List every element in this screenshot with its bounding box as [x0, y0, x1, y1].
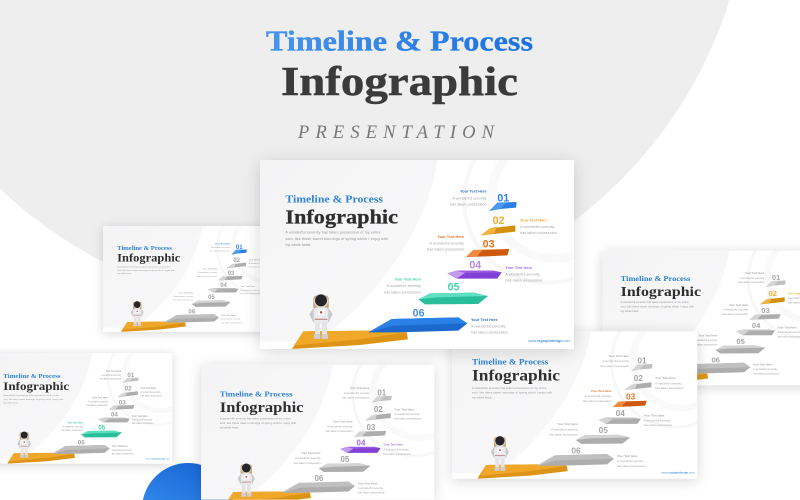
step 06: Your Text Here [471, 318, 498, 322]
slide: lower left, step 05 highlighted: A wonderful serenity [101, 374, 122, 377]
slide: upper right, step 02 highlighted: 06 [711, 355, 720, 364]
slide: lower right, step 03 highlighted: Your Text Here [617, 454, 638, 458]
slide: lower right, step 03 highlighted: A wonderful serenity [551, 427, 578, 431]
step 04: A wonderful serenity [505, 273, 540, 277]
slide: upper right, step 02 highlighted: has taken possession [691, 343, 718, 347]
slide: bottom center, step 04 highlighted: A wonderful serenity has taken possession of my entire [220, 416, 291, 420]
slide: bottom center, step 04 highlighted: Your Text Here [383, 443, 403, 447]
slide: bottom center, step 04 highlighted: Your Text Here [358, 481, 378, 485]
slide: lower left, step 05 highlighted: Your Text Here [92, 397, 109, 400]
step 02: 02 [493, 215, 505, 227]
slide: upper right, step 02 highlighted: 02 [769, 289, 777, 298]
slide: lower right, step 03 highlighted: A wonderful serenity has taken possession of my entire [472, 386, 547, 390]
step 04: 04 [469, 260, 481, 272]
step 05 [384, 277, 488, 304]
slide: upper left, step 01 highlighted: 01 [236, 245, 243, 251]
slide: lower left, step 05 highlighted [0, 350, 176, 469]
slide: upper right, step 02 highlighted: my whole heart. [621, 309, 639, 313]
step 03: A wonderful serenity [430, 241, 464, 245]
slide: upper left, step 01 highlighted: my whole heart. [117, 272, 132, 275]
slide: upper right, step 02 highlighted: Infographic [621, 285, 701, 300]
slide: upper left, step 01 highlighted: 05 [208, 295, 215, 301]
slide: lower left, step 05 highlighted: A wonderful serenity [63, 425, 84, 428]
slide: upper right, step 02 highlighted: 05 [736, 337, 746, 346]
slide: bottom center, step 04 highlighted: Your Text Here [333, 420, 353, 424]
slide: lower left, step 05 highlighted: A wonderful serenity [112, 449, 133, 452]
slide: upper left, step 01 highlighted: has taken possession [197, 275, 218, 278]
slide: lower right, step 03 highlighted: Your Text Here [608, 354, 629, 358]
slide: upper right, step 02 highlighted: 04 [752, 321, 761, 330]
slide: lower left, step 05 highlighted: 06 [78, 440, 85, 447]
slide: lower left, step 05 highlighted: has taken possession [141, 394, 163, 397]
slide: upper left, step 01 highlighted: Your Text Here [215, 242, 231, 245]
slide: upper left, step 01 highlighted: Your Text Here [178, 291, 194, 294]
slide: bottom center, step 04 highlighted: Infographic [220, 400, 304, 416]
slide: upper left, step 01 highlighted: Timeline & Process [117, 246, 173, 252]
slide: lower left, step 05 highlighted: www. rsgraphdesign .com [145, 458, 170, 460]
slide: bottom center, step 04 highlighted: soul, like these sweet mornings of spring which I enjoy with [220, 421, 297, 425]
slide: bottom center, step 04 highlighted: A wonderful serenity [383, 448, 409, 452]
step 06: 06 [413, 308, 425, 320]
step 02: Your Text Here [520, 218, 547, 222]
slide: upper right, step 02 highlighted: has taken possession [738, 280, 765, 284]
large gray circle [0, 0, 750, 311]
slide: upper right, step 02 highlighted [598, 248, 800, 392]
step 03 [427, 235, 509, 257]
slide: bottom center, step 04 highlighted: A wonderful serenity [344, 391, 370, 395]
slide: upper left, step 01 highlighted: Your Text Here [221, 314, 237, 317]
slide: lower right, step 03 highlighted: has taken possession [655, 386, 684, 390]
slide: lower left, step 05 highlighted: A wonderful serenity [132, 419, 153, 422]
panel: main slide, all steps coloured [253, 156, 581, 358]
step 02: has taken possession [520, 231, 557, 235]
slide: lower right, step 03 highlighted: www.rsgraphdesign.com [662, 470, 695, 474]
slide paragraph [285, 231, 388, 247]
slide: lower right, step 03 highlighted: 03 [626, 392, 636, 402]
slide: bottom center, step 04 highlighted: 02 [374, 405, 383, 414]
slide: lower right, step 03 highlighted: Timeline & Process [472, 358, 548, 367]
slide: lower right, step 03 highlighted: A wonderful serenity [585, 394, 612, 398]
slide: upper right, step 02 highlighted: Your Text Here [745, 271, 765, 275]
slide: lower left, step 05 highlighted: A wonderful serenity [141, 391, 162, 394]
slide: upper right, step 02 highlighted: 01 [772, 273, 781, 282]
slide: lower right, step 03 highlighted: A wonderful serenity [644, 419, 671, 423]
slide: upper right, step 02 highlighted: A wonderful serenity [693, 338, 718, 342]
slide: lower right, step 03 highlighted: 06 [571, 445, 581, 455]
slide: lower left, step 05 highlighted: A wonderful serenity [88, 400, 109, 403]
slide: lower right, step 03 highlighted: my whole heart. [472, 395, 492, 399]
slide: upper right, step 02 highlighted: A wonderful serenity [724, 308, 749, 312]
slide: upper right, step 02 highlighted: soul, like these sweet mornings of spring which I enjoy with [621, 305, 694, 309]
slide: upper right, step 02 highlighted: has taken possession [722, 312, 749, 316]
slide: lower right, step 03 highlighted: has taken possession [617, 464, 646, 468]
step 05: 05 [448, 282, 460, 294]
slide: lower right, step 03 highlighted: 01 [637, 356, 647, 366]
slide: upper left, step 01 highlighted: 04 [220, 283, 228, 289]
slide: lower right, step 03 highlighted: Your Text Here [591, 389, 612, 393]
slide: lower left, step 05 highlighted: has taken possession [132, 422, 154, 425]
slide: lower left, step 05 highlighted: has taken possession [61, 429, 83, 432]
step 05: A wonderful serenity [387, 284, 421, 288]
slide: bottom center, step 04 highlighted: has taken possession [293, 461, 321, 465]
slide: lower left, step 05 highlighted: soul, like these sweet mornings of spring which I enjoy with [3, 398, 64, 401]
slide: bottom center, step 04 highlighted: 06 [314, 474, 324, 483]
slide: bottom center, step 04 highlighted: has taken possession [383, 452, 411, 456]
step 04: Your Text Here [505, 266, 532, 270]
slide: bottom center, step 04 highlighted: Your Text Here [301, 451, 321, 455]
slide: lower right, step 03 highlighted: Your Text Here [644, 413, 665, 417]
slide: lower left, step 05 highlighted: 05 [98, 424, 106, 431]
slide: upper left, step 01 highlighted: A wonderful serenity [240, 289, 260, 292]
slide: bottom center, step 04 highlighted: my whole heart. [220, 426, 239, 430]
slide: lower left, step 05 highlighted: has taken possession [86, 404, 109, 407]
slide: lower left, step 05 highlighted: 03 [119, 399, 126, 406]
slide: lower right, step 03 highlighted: Your Text Here [655, 376, 676, 380]
blue circle [143, 463, 233, 500]
slide paragraph: soul, like these sweet mornings of spring which I enjoy with [285, 237, 388, 241]
slide: upper right, step 02 highlighted: 03 [761, 306, 770, 315]
slide: upper left, step 01 highlighted: Your Text Here [240, 285, 256, 288]
slide: upper left, step 01 highlighted: A wonderful serenity has taken possession of my entire [117, 265, 171, 268]
slide: bottom center, step 04 highlighted: 03 [366, 423, 376, 432]
slide: bottom center, step 04 highlighted [196, 362, 440, 500]
slide: lower right, step 03 highlighted: 04 [616, 408, 625, 418]
slide: bottom center, step 04 highlighted: 04 [357, 438, 366, 447]
slide: upper left, step 01 highlighted: A wonderful serenity [198, 271, 218, 274]
slide: lower right, step 03 highlighted: Infographic [472, 368, 560, 385]
slide: lower left, step 05 highlighted: has taken possession [100, 378, 122, 381]
slide: lower right, step 03 highlighted: A wonderful serenity [602, 359, 630, 363]
step 06 [368, 308, 508, 335]
slide: bottom center, step 04 highlighted: has taken possession [325, 429, 353, 433]
step 01 [450, 190, 517, 211]
slide: upper left, step 01 highlighted: Your Text Here [249, 258, 264, 261]
slide: lower left, step 05 highlighted: Your Text Here [141, 387, 157, 390]
slide: upper right, step 02 highlighted: A wonderful serenity has taken possession of my entire [621, 300, 689, 304]
slide: upper left, step 01 highlighted: has taken possession [249, 265, 270, 268]
step 01: 01 [497, 192, 509, 204]
slide: upper left, step 01 highlighted: Infographic [117, 252, 180, 264]
heading: Timeline & Process: Timeline & Process [266, 26, 533, 58]
slide: bottom center, step 04 highlighted: Your Text Here [350, 386, 370, 390]
slide: lower left, step 05 highlighted: A wonderful serenity has taken possession of my entire [3, 394, 60, 397]
slide: upper right, step 02 highlighted: A wonderful serenity [753, 367, 778, 371]
step 02: A wonderful serenity [520, 225, 555, 229]
step 06: has taken possession [471, 331, 508, 335]
slide: bottom center, step 04 highlighted: A wonderful serenity [295, 456, 321, 460]
slide: lower left, step 05 highlighted: 04 [111, 412, 118, 419]
slide: lower right, step 03 highlighted: Your Text Here [557, 422, 578, 426]
heading: Presentation: PRESENTATION [297, 123, 496, 143]
slide: lower left, step 05 highlighted: 01 [127, 372, 135, 379]
step 01: A wonderful serenity [452, 197, 487, 201]
slide: bottom center, step 04 highlighted: Your Text Here [394, 407, 414, 411]
slide: lower right, step 03 highlighted: 02 [634, 373, 643, 383]
slide: upper right, step 02 highlighted: Your Text Here [698, 333, 718, 337]
slide paragraph: A wonderful serenity has taken possession of my entire [285, 231, 381, 235]
step 06: A wonderful serenity [471, 324, 506, 328]
slide: upper left, step 01 highlighted: has taken possession [240, 292, 262, 295]
step 04: has taken possession [505, 279, 542, 283]
slide: lower right, step 03 highlighted: has taken possession [549, 432, 578, 436]
step 04 [447, 260, 542, 283]
slide: bottom center, step 04 highlighted: A wonderful serenity [358, 486, 384, 490]
slide: bottom center, step 04 highlighted: has taken possession [394, 417, 422, 421]
step 01: has taken possession [450, 203, 487, 207]
slide: lower right, step 03 highlighted: has taken possession [601, 364, 629, 368]
slide: upper right, step 02 highlighted: Your Text Here [753, 362, 772, 366]
slide: lower right, step 03 highlighted [447, 328, 702, 486]
step 03: Your Text Here [437, 235, 464, 239]
slide: upper left, step 01 highlighted: 03 [228, 271, 235, 277]
slide: lower right, step 03 highlighted: soul, like these sweet mornings of spring which I enjoy with [472, 391, 553, 395]
slide: upper left, step 01 highlighted [99, 224, 260, 337]
slide: bottom center, step 04 highlighted: Timeline & Process [220, 389, 292, 398]
slide: upper left, step 01 highlighted: soul, like these sweet mornings of spring which I enjoy with [117, 269, 175, 272]
slide: bottom center, step 04 highlighted: 01 [377, 388, 387, 397]
slide: lower left, step 05 highlighted: has taken possession [112, 453, 134, 456]
slide: upper left, step 01 highlighted: has taken possession [210, 250, 231, 253]
slide: upper left, step 01 highlighted: A wonderful serenity [211, 246, 231, 249]
heading: Infographic: Infographic [281, 58, 518, 104]
step 03: 03 [483, 239, 495, 251]
slide: lower right, step 03 highlighted: A wonderful serenity [617, 459, 644, 463]
step 01: Your Text Here [460, 190, 487, 194]
orange platform [292, 331, 408, 349]
slide: lower right, step 03 highlighted: has taken possession [583, 399, 612, 403]
slide: upper left, step 01 highlighted: has taken possession [173, 299, 194, 302]
slide: upper left, step 01 highlighted: 06 [189, 310, 196, 316]
slide: lower left, step 05 highlighted: Timeline & Process [3, 374, 61, 380]
slide paragraph: my whole heart. [285, 243, 311, 247]
icon: astronaut [312, 294, 330, 339]
slide: upper right, step 02 highlighted: Timeline & Process [621, 274, 690, 283]
slide: lower left, step 05 highlighted: Infographic [3, 381, 69, 393]
slide: bottom center, step 04 highlighted: has taken possession [342, 396, 370, 400]
slide heading: Infographic: Infographic [285, 206, 398, 228]
slide: lower left, step 05 highlighted: Your Text Here [106, 370, 122, 373]
slide: lower left, step 05 highlighted: Your Text Here [112, 445, 128, 448]
slide: bottom center, step 04 highlighted: has taken possession [358, 491, 385, 495]
slide: lower left, step 05 highlighted: Your Text Here [132, 415, 148, 418]
step 02 [481, 215, 557, 235]
slide: lower left, step 05 highlighted: Your Text Here [67, 421, 83, 424]
slide: lower left, step 05 highlighted: my whole heart. [3, 401, 19, 404]
slide: bottom center, step 04 highlighted: 05 [340, 455, 350, 464]
slide: upper left, step 01 highlighted: has taken possession [221, 321, 242, 324]
slide: upper right, step 02 highlighted: A wonderful serenity [740, 276, 765, 280]
slide: lower right, step 03 highlighted: 05 [599, 425, 608, 435]
slide: upper right, step 02 highlighted: Your Text Here [729, 303, 749, 307]
step 05: has taken possession [384, 290, 421, 294]
slide: upper left, step 01 highlighted: 02 [233, 258, 241, 264]
slide heading: Timeline & Process: Timeline & Process [285, 195, 383, 206]
step 03: has taken possession [427, 248, 464, 252]
slide: bottom center, step 04 highlighted: A wonderful serenity [394, 412, 420, 416]
slide: upper right, step 02 highlighted: Your Text Here [778, 325, 797, 329]
slide: lower left, step 05 highlighted: 02 [125, 385, 132, 392]
slide: lower right, step 03 highlighted: A wonderful serenity [655, 381, 682, 385]
slide: upper left, step 01 highlighted: A wonderful serenity [221, 318, 241, 321]
step 05: Your Text Here [394, 277, 421, 281]
slide: upper right, step 02 highlighted: has taken possession [753, 371, 780, 375]
slide: bottom center, step 04 highlighted: A wonderful serenity [327, 424, 353, 428]
slide: upper left, step 01 highlighted: A wonderful serenity [249, 262, 269, 265]
slide: upper left, step 01 highlighted: Your Text Here [202, 268, 218, 271]
website link: www.rsgraphdesign.com [528, 339, 570, 343]
slide: upper left, step 01 highlighted: A wonderful serenity [174, 295, 194, 298]
slide: lower right, step 03 highlighted: has taken possession [644, 423, 673, 427]
